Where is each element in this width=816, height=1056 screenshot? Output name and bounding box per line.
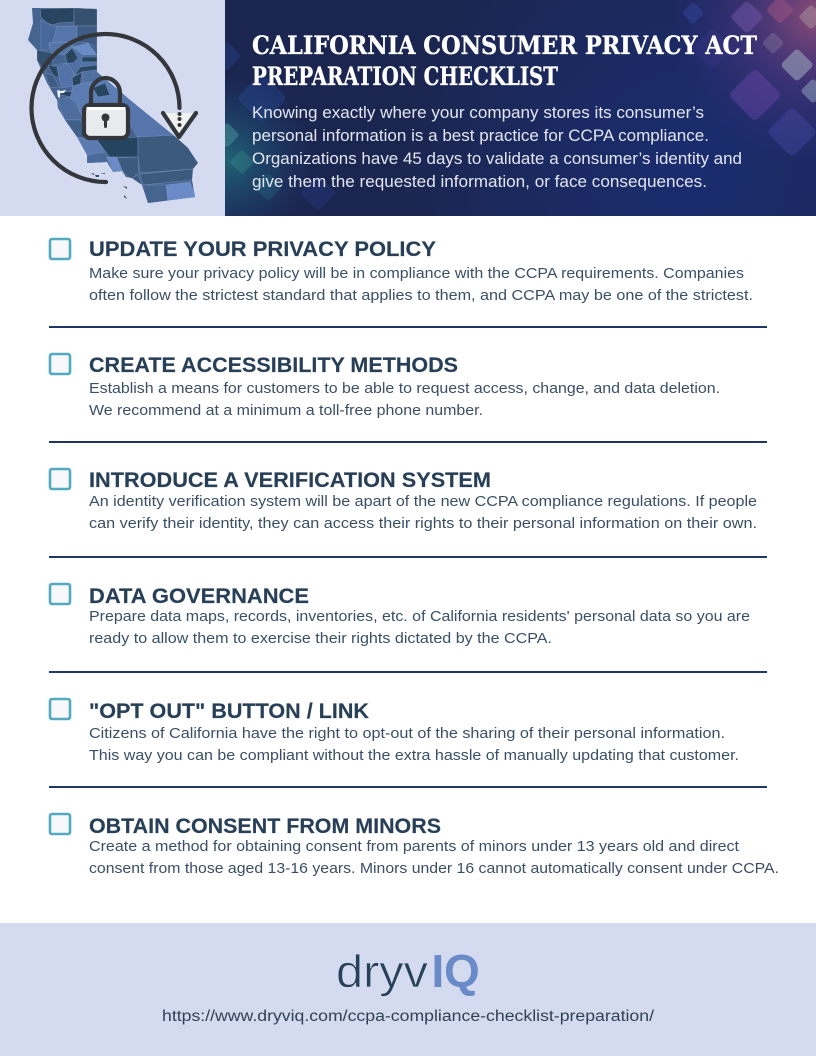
- intro text: personal information is a best practice for CCPA compliance.: [252, 127, 709, 145]
- body text: [89, 493, 757, 532]
- heading: UPDATE YOUR PRIVACY POLICY: [89, 238, 436, 261]
- body text: [89, 380, 720, 419]
- body text: Create a method for obtaining consent from parents of minors under 13 years old and direct: [89, 838, 740, 855]
- intro text: Knowing exactly where your company stores its consumer’s: [252, 104, 704, 122]
- website url: https://www.dryviq.com/ccpa-compliance-checklist-preparation/: [162, 1008, 655, 1025]
- checklist item: opt out button or link: [50, 699, 739, 764]
- body text: Make sure your privacy policy will be in compliance with the CCPA requirements. Companies: [89, 265, 744, 282]
- icon: checkbox: [50, 699, 70, 719]
- intro text: give them the requested information, or face consequences.: [252, 173, 707, 191]
- intro text: Organizations have 45 days to validate a consumer’s identity and: [252, 150, 742, 168]
- body text: [89, 725, 739, 764]
- heading: DATA GOVERNANCE: [89, 585, 309, 608]
- logo: dryvIQ: Q: [444, 945, 480, 997]
- logo: dryvIQ: [336, 945, 480, 997]
- body text: Establish a means for customers to be able to request access, change, and data deletion.: [89, 380, 720, 397]
- logo: dryvIQ: dryv: [336, 946, 429, 997]
- San Francisco bay gap: [57, 90, 66, 98]
- icon: checkbox: [50, 584, 70, 604]
- body text: [89, 608, 750, 647]
- icon: California county map: [28, 8, 198, 203]
- title: CALIFORNIA CONSUMER PRIVACY ACT: [252, 31, 757, 60]
- heading: INTRODUCE A VERIFICATION SYSTEM: [89, 469, 491, 492]
- heading: "OPT OUT" BUTTON / LINK: [89, 700, 369, 723]
- icon: checkbox: [50, 814, 70, 834]
- panel: header banner: [210, 0, 816, 216]
- body text: Prepare data maps, records, inventories, etc. of California residents' personal data so you are: [89, 608, 750, 625]
- icon: checkbox: [50, 239, 70, 259]
- logo: dryvIQ: I: [432, 945, 444, 997]
- body text: [89, 265, 753, 304]
- body text: An identity verification system will be apart of the new CCPA compliance regulations. If people: [89, 493, 757, 510]
- heading: OBTAIN CONSENT FROM MINORS: [89, 815, 441, 838]
- body text: We recommend at a minimum a toll-free phone number.: [89, 402, 483, 419]
- intro text: [252, 104, 742, 191]
- title: [252, 31, 757, 91]
- body text: ready to allow them to exercise their rights dictated by the CCPA.: [89, 630, 552, 647]
- checklist item: obtain consent from minors: [50, 814, 779, 877]
- icon: padlock: [84, 78, 128, 138]
- body text: Citizens of California have the right to opt-out of the sharing of their personal information.: [89, 725, 725, 742]
- body text: can verify their identity, they can access their rights to their personal information on their own.: [89, 515, 757, 532]
- body text: This way you can be compliant without the extra hassle of manually updating that customer.: [89, 747, 739, 764]
- checklist item: update your privacy policy: [50, 238, 753, 304]
- checklist item: data governance: [50, 584, 750, 647]
- decorative diamonds: [210, 0, 816, 211]
- icon: checkbox: [50, 354, 70, 374]
- body text: [89, 838, 779, 877]
- checklist item: create accessibility methods: [50, 354, 720, 419]
- heading: CREATE ACCESSIBILITY METHODS: [89, 354, 458, 377]
- channel islands: [91, 173, 127, 199]
- title: PREPARATION CHECKLIST: [252, 62, 558, 91]
- checklist item: introduce a verification system: [50, 469, 757, 532]
- panel: map illustration: [0, 0, 225, 216]
- panel: footer: [0, 923, 816, 1056]
- icon: circular arrow: [31, 34, 196, 182]
- body text: often follow the strictest standard that applies to them, and CCPA may be one of the strictest.: [89, 287, 753, 304]
- icon: checkbox: [50, 469, 70, 489]
- body text: consent from those aged 13-16 years. Minors under 16 cannot automatically consent under CCPA.: [89, 860, 779, 877]
